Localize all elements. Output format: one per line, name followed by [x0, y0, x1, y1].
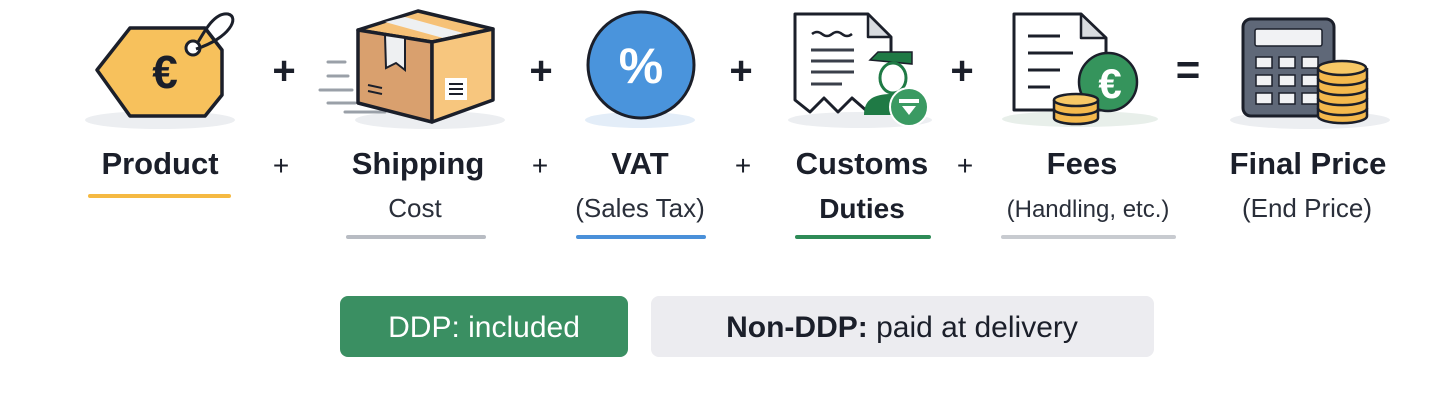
small plus signs between labels: +	[273, 150, 289, 181]
label: Customs Duties: Customs	[796, 146, 928, 181]
icon: fees document with coins: €	[1098, 60, 1122, 107]
label: Customs Duties: Duties	[819, 193, 905, 224]
label: VAT: (Sales Tax)	[575, 193, 705, 223]
badge: DDP included: DDP: included	[388, 311, 580, 344]
small plus signs between labels: +	[532, 150, 548, 181]
badge: DDP included	[340, 296, 628, 357]
small plus signs between labels: +	[735, 150, 751, 181]
icon: fees document with coins	[1002, 14, 1158, 127]
plus sign 2: +	[529, 49, 553, 93]
label: Customs Duties	[795, 146, 931, 239]
label: Shipping Cost: Shipping	[352, 146, 484, 181]
label: Shipping Cost: Cost	[388, 193, 443, 223]
label: Product	[88, 146, 231, 198]
icon: shipping box	[320, 11, 505, 129]
label: Final Price	[1230, 146, 1386, 223]
plus sign 1: +	[272, 49, 296, 93]
label: Final Price: (End Price)	[1242, 193, 1372, 223]
small plus signs between labels	[273, 150, 973, 181]
icon: VAT percent circle: %	[619, 38, 663, 94]
label: Fees	[1001, 146, 1176, 239]
label: Product: Product	[101, 146, 219, 181]
small plus signs between labels: +	[957, 150, 973, 181]
icon: price tag: €	[152, 46, 178, 98]
plus sign 4: +	[950, 49, 974, 93]
icon: VAT percent circle	[585, 12, 695, 128]
badge: Non-DDP paid at delivery: Non-DDP: paid at delivery	[726, 311, 1078, 344]
label: VAT: VAT	[611, 146, 669, 181]
icon: customs document with officer	[788, 14, 932, 128]
icon: calculator with coins	[1230, 19, 1390, 129]
label: VAT	[575, 146, 706, 239]
label: Shipping Cost	[346, 146, 486, 239]
label: Final Price: Final Price	[1230, 146, 1386, 181]
icon: price tag	[85, 14, 235, 129]
label: Fees: Fees	[1047, 146, 1117, 181]
label: Fees: (Handling, etc.)	[1007, 196, 1169, 223]
plus sign 3: +	[729, 49, 753, 93]
badge: Non-DDP paid at delivery	[651, 296, 1154, 357]
equals sign: =	[1176, 46, 1200, 93]
